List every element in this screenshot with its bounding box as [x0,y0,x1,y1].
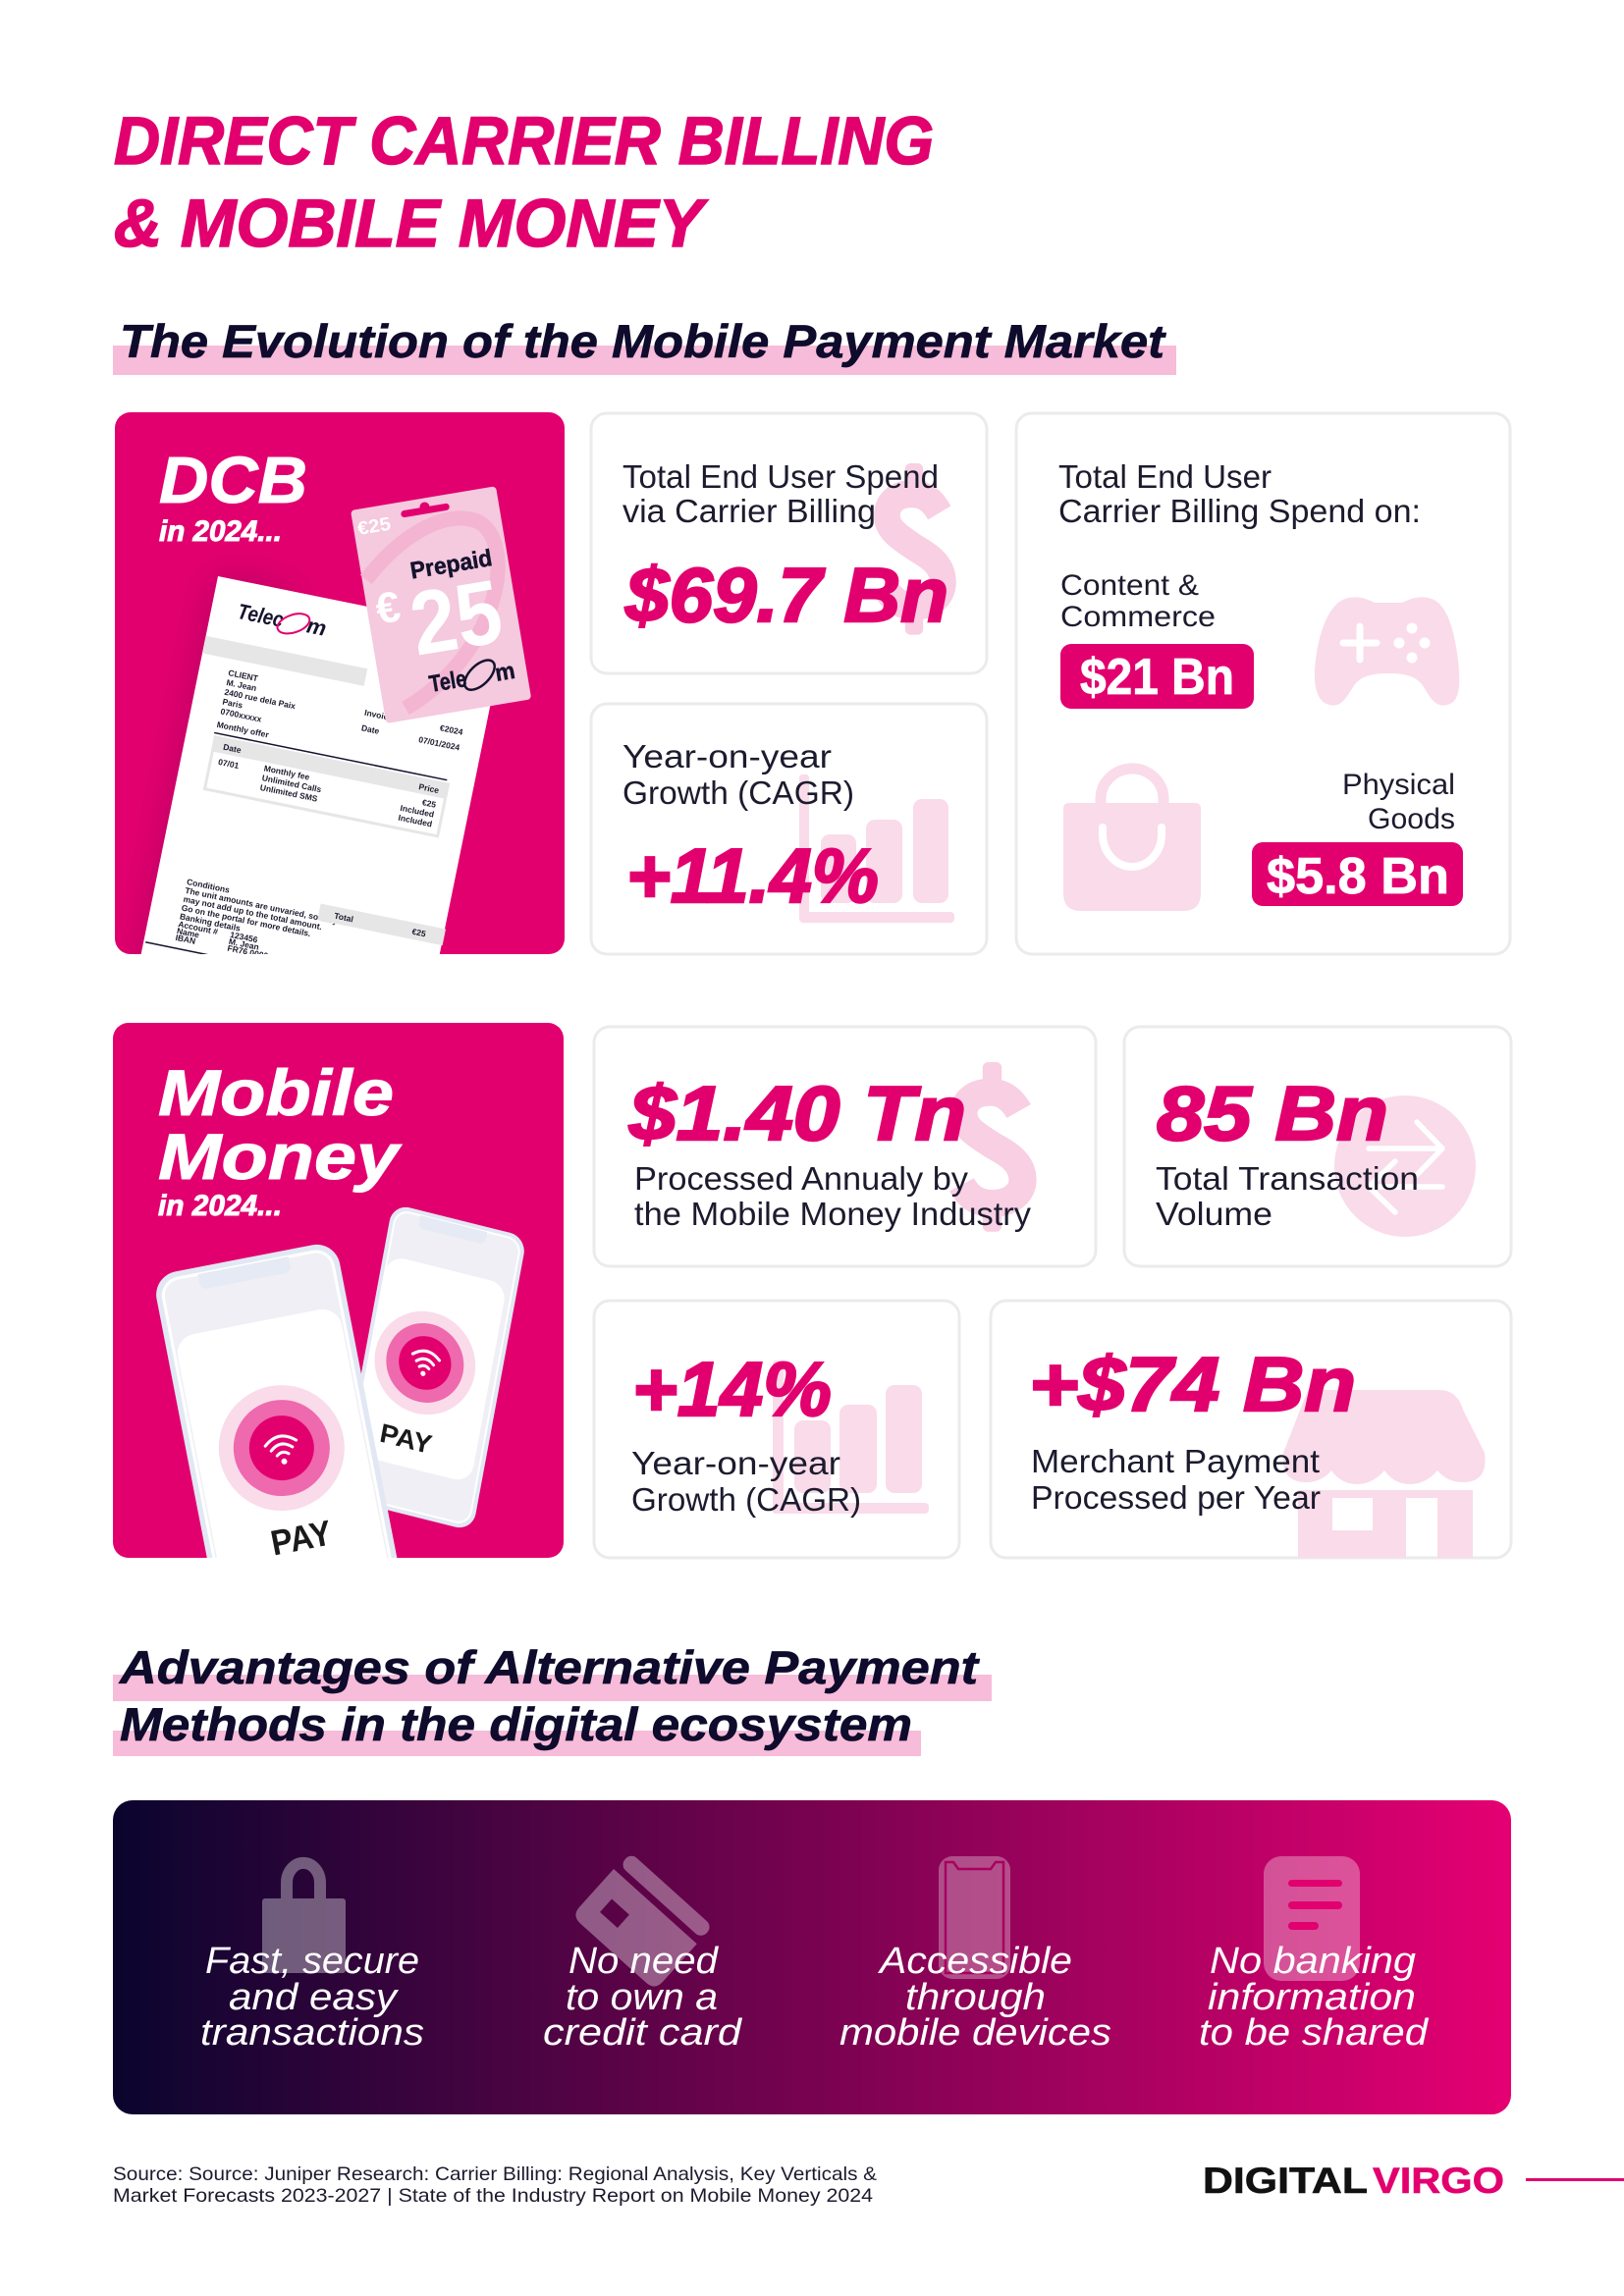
illustration: front phone: PAY [267,1512,335,1564]
card: carrier billing spend breakdown: Carrier Billing Spend on: [1058,493,1421,529]
source note [113,2163,877,2207]
advantage: mobile devices: Accessible [878,1941,1072,1982]
panel: DCB in 2024 [115,412,565,954]
icon: transfer arrows [1334,1095,1476,1237]
advantage: no credit card: No need [568,1941,720,1982]
title: DIRECT CARRIER BILLING [114,103,934,179]
illustration: back phone [361,1207,524,1527]
advantage: no banking information: information [1208,1977,1416,2018]
heading: advantages of alternative payment methods: Methods in the digital ecosystem [120,1698,912,1750]
invoice illustration: Account # [178,919,219,936]
prepaid card illustration [351,486,531,723]
invoice illustration: Monthly fee [263,763,311,782]
card: carrier billing spend breakdown: Physical [1342,769,1455,801]
advantage: no credit card [543,1941,743,2054]
panel: mobile money in 2024 [113,1023,564,1558]
icon: document [1264,1856,1360,1981]
invoice illustration: Monthly offer [216,720,270,740]
invoice illustration: €25 [421,797,437,810]
card: total end user spend [591,413,987,673]
card: processed annually: Processed Annualy by [634,1160,969,1197]
advantage: no banking information: No banking [1210,1941,1416,1982]
advantage: no credit card: to own a [566,1977,718,2018]
invoice illustration: Telec [236,599,286,632]
prepaid card illustration: Tele [427,666,468,698]
card: processed annually [594,1027,1096,1266]
heading: advantages of alternative payment methods [113,1641,992,1756]
card: merchant payment: Merchant Payment [1031,1443,1320,1479]
source note: Market Forecasts 2023-2027 | State of the Industry Report on Mobile Money 2024 [113,2185,873,2207]
prepaid card illustration: €25 [356,514,393,540]
card: carrier billing spend breakdown: Goods [1368,803,1455,835]
card: carrier billing spend breakdown [1016,413,1510,954]
icon: bar chart [799,774,954,923]
card: merchant payment [991,1301,1511,1558]
invoice illustration: 123456 [230,930,259,944]
invoice illustration: €25 [411,927,427,938]
card: merchant payment: Processed per Year [1031,1479,1321,1516]
badge: $5.8 Bn: $5.8 Bn [1267,848,1449,905]
invoice illustration: Date [360,722,381,736]
card: carrier billing spend breakdown: Total End User [1058,458,1272,495]
invoice illustration: Name [176,926,200,939]
prepaid card illustration: m [493,658,516,687]
advantage: mobile devices: mobile devices [839,2012,1111,2054]
badge: $21 Bn: $21 Bn [1080,649,1234,706]
invoice illustration: m [304,613,329,641]
advantage: fast secure easy [200,1941,424,2054]
icon: padlock [262,1863,346,1973]
icon: credit card [571,1851,713,1991]
advantage: no banking information [1199,1941,1430,2054]
invoice illustration: Price [418,781,440,795]
icon: shopping bag [1063,769,1201,911]
advantage: fast secure easy: transactions [200,2012,424,2054]
panel subheading: in 2024 (Mobile Money): in 2024... [158,1190,282,1222]
card: year-on-year growth DCB: +11.4% [626,832,879,919]
invoice illustration: Included [400,803,435,820]
card: total transaction volume: 85 Bn [1157,1070,1388,1156]
card: carrier billing spend breakdown: Content & [1060,569,1199,602]
advantage: fast secure easy: and easy [229,1977,399,2018]
card: total end user spend: Total End User Spend [623,458,939,495]
card: year-on-year growth mobile money: Year-on-year [631,1445,840,1481]
icon: smartphone [939,1856,1010,1979]
card: year-on-year growth DCB: Year-on-year [623,738,832,774]
heading: advantages of alternative payment methods: Advantages of Alternative Payment [119,1641,981,1693]
invoice illustration: Go on the portal for more details. [181,902,311,938]
invoice illustration: 07/01 [217,757,240,771]
card: processed annually: $1.40 Tn [628,1070,966,1156]
prepaid card illustration: € [372,582,404,634]
card: year-on-year growth mobile money [594,1301,959,1558]
icon: dollar large [961,1062,1023,1232]
card: total end user spend: via Carrier Billing [623,493,876,529]
invoice illustration: Conditions [186,877,231,895]
panel heading: Mobile Money: Mobile [158,1056,394,1129]
invoice illustration: Included [398,813,433,828]
title: & MOBILE MONEY [114,186,709,261]
advantage: fast secure easy: Fast, secure [205,1941,419,1982]
advantage: no banking information: to be shared [1199,2012,1430,2054]
invoice illustration: Paris [222,697,244,711]
invoice illustration: Date [223,742,243,755]
logo: Digital Virgo [1203,2161,1504,2201]
advantage: mobile devices [839,1941,1111,2054]
card: year-on-year growth mobile money: +14% [632,1346,832,1432]
panel heading: DCB: DCB [159,444,307,517]
invoice illustration: CLIENT [228,667,260,683]
invoice illustration: IBAN [175,933,196,946]
card: year-on-year growth DCB [591,704,987,954]
advantage: mobile devices: through [905,1977,1046,2018]
panel: advantages gradient band [113,1800,1511,2114]
panel subheading: in 2024 (DCB): in 2024... [159,515,282,548]
logo: Digital Virgo: VIRGO [1373,2161,1504,2201]
source note: Source: Source: Juniper Research: Carrier Billing: Regional Analysis, Key Verticals & [113,2163,877,2185]
icon: shop [1283,1390,1486,1558]
card: total transaction volume [1124,1027,1511,1266]
illustration: back phone: PAY [378,1418,434,1460]
invoice illustration: 2400 rue dela Paix [224,687,297,711]
icon: gamepad [1315,597,1459,706]
invoice illustration: M. Jean [228,936,260,952]
invoice illustration: Total [333,911,354,924]
title [114,103,934,261]
invoice illustration: Invoice [363,708,394,722]
card: total transaction volume: Total Transaction [1156,1160,1419,1197]
invoice illustration: 07/01/2024 [417,734,460,753]
icon: bar chart [773,1361,929,1514]
card: total transaction volume: Volume [1156,1196,1272,1232]
invoice illustration: FR76 0000 0000 0000 [227,943,310,969]
card: carrier billing spend breakdown: Commerce [1060,601,1216,633]
prepaid card illustration: 25 [404,561,509,675]
invoice illustration: M. Jean [226,677,257,693]
card: year-on-year growth mobile money: Growth (CAGR) [631,1481,861,1518]
invoice illustration: may not add up to the total amount. [183,894,323,932]
invoice illustration: Unlimited Calls [261,773,322,794]
heading: evolution of the mobile payment market: The Evolution of the Mobile Payment Market [120,315,1167,367]
panel heading: Mobile Money [158,1056,403,1193]
invoice illustration: Unlimited SMS [259,782,319,804]
invoice illustration: 0700xxxxx [220,706,263,724]
panel heading: Mobile Money: Money [158,1120,403,1193]
invoice illustration: €2024 [439,722,464,737]
logo: Digital Virgo: DIGITAL [1203,2161,1368,2201]
icon: dollar [886,463,943,635]
illustration: front phone [156,1245,397,1558]
invoice illustration [141,576,491,954]
advantage: no credit card: credit card [543,2012,743,2054]
invoice illustration: The unit amounts are unvaried, so they [185,885,339,926]
invoice illustration: Banking details [179,911,242,934]
card: merchant payment: +$74 Bn [1029,1341,1356,1427]
card: processed annually: the Mobile Money Industry [634,1196,1032,1232]
card: total end user spend: $69.7 Bn [624,552,948,638]
prepaid card illustration: Prepaid [408,545,494,585]
card: year-on-year growth DCB: Growth (CAGR) [623,774,854,811]
